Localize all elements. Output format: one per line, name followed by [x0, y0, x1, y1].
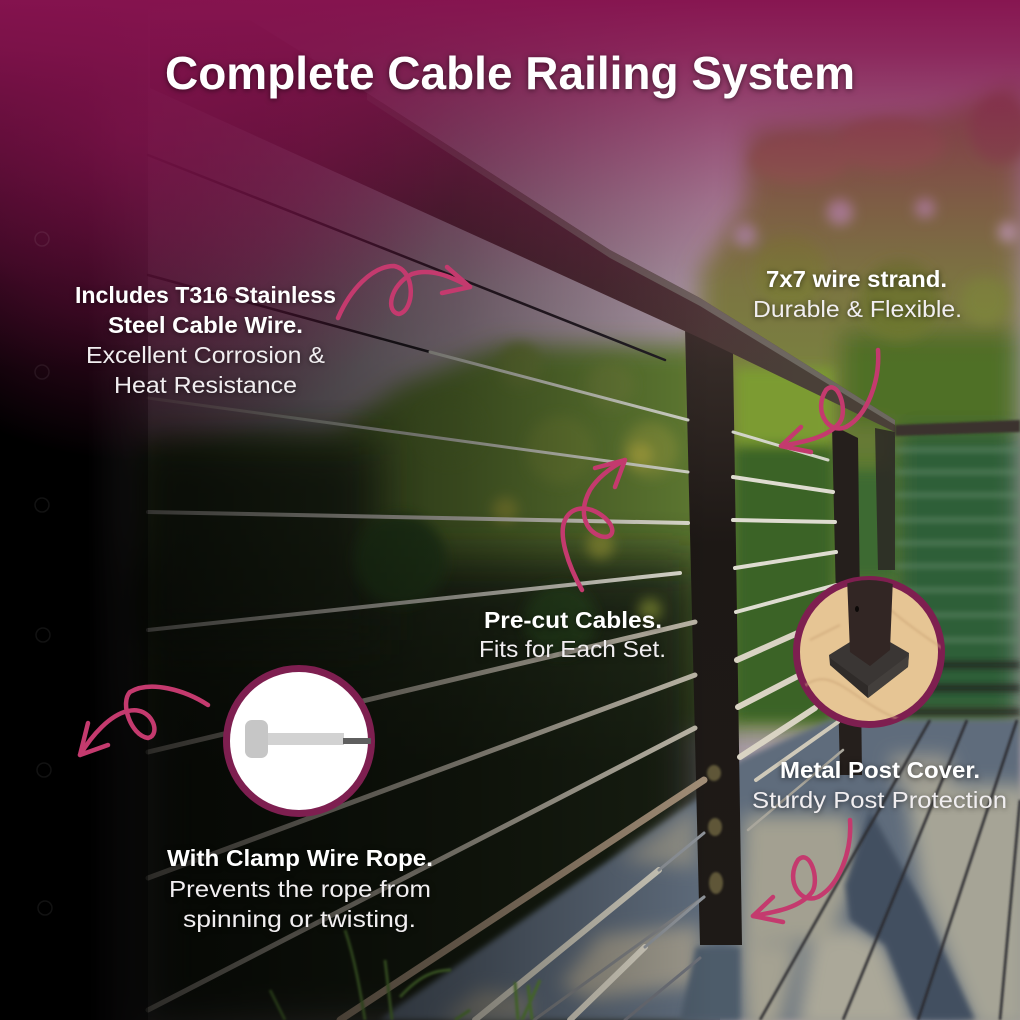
- icon: clamp wire rope circle: [226, 668, 373, 814]
- callout: pre-cut cables: [479, 607, 666, 662]
- callout: metal post cover: Sturdy Post Protection: [752, 787, 1007, 813]
- callout: 7x7 wire strand: [753, 266, 962, 322]
- callout: stainless steel cable wire: Includes T316 Stainless: [75, 282, 336, 308]
- callout: clamp wire rope: spinning or twisting.: [183, 906, 416, 932]
- arrow: to right cable: [781, 350, 878, 452]
- callout: stainless steel cable wire: Excellent Corrosion &: [86, 342, 325, 368]
- title: Complete Cable Railing System: [165, 47, 855, 99]
- cable mounts on post: [707, 765, 723, 894]
- far garden seen between posts: [735, 368, 895, 720]
- distant posts: [832, 425, 895, 775]
- callout: 7x7 wire strand: Durable & Flexible.: [753, 296, 962, 322]
- icon: metal post cover circle: [796, 577, 945, 724]
- callout: clamp wire rope: Prevents the rope from: [169, 876, 431, 902]
- arrow: to left end fitting: [80, 687, 208, 755]
- callout: pre-cut cables: Fits for Each Set.: [479, 636, 666, 662]
- callout: metal post cover: Metal Post Cover.: [780, 757, 980, 783]
- top rail: [150, 20, 1020, 436]
- callout: stainless steel cable wire: [75, 282, 336, 398]
- callout: stainless steel cable wire: Steel Cable Wire.: [108, 312, 303, 338]
- main post: [685, 328, 742, 945]
- deck boards: [380, 720, 1020, 1020]
- callout: 7x7 wire strand: 7x7 wire strand.: [766, 266, 947, 292]
- callout: stainless steel cable wire: Heat Resistance: [114, 372, 297, 398]
- callout: clamp wire rope: [167, 845, 433, 932]
- left post bolts: [35, 232, 52, 915]
- tree canopy detail: [354, 96, 1020, 656]
- callout: metal post cover: [752, 757, 1007, 813]
- arrow: to top cable: [338, 266, 470, 318]
- arrow: to post base: [753, 820, 850, 922]
- callout: clamp wire rope: With Clamp Wire Rope.: [167, 845, 433, 871]
- plants at the bottom: [270, 930, 540, 1020]
- callout: pre-cut cables: Pre-cut Cables.: [484, 607, 662, 633]
- stainless steel cables: [148, 155, 843, 1020]
- arrow: to pre-cut cable: [563, 460, 625, 590]
